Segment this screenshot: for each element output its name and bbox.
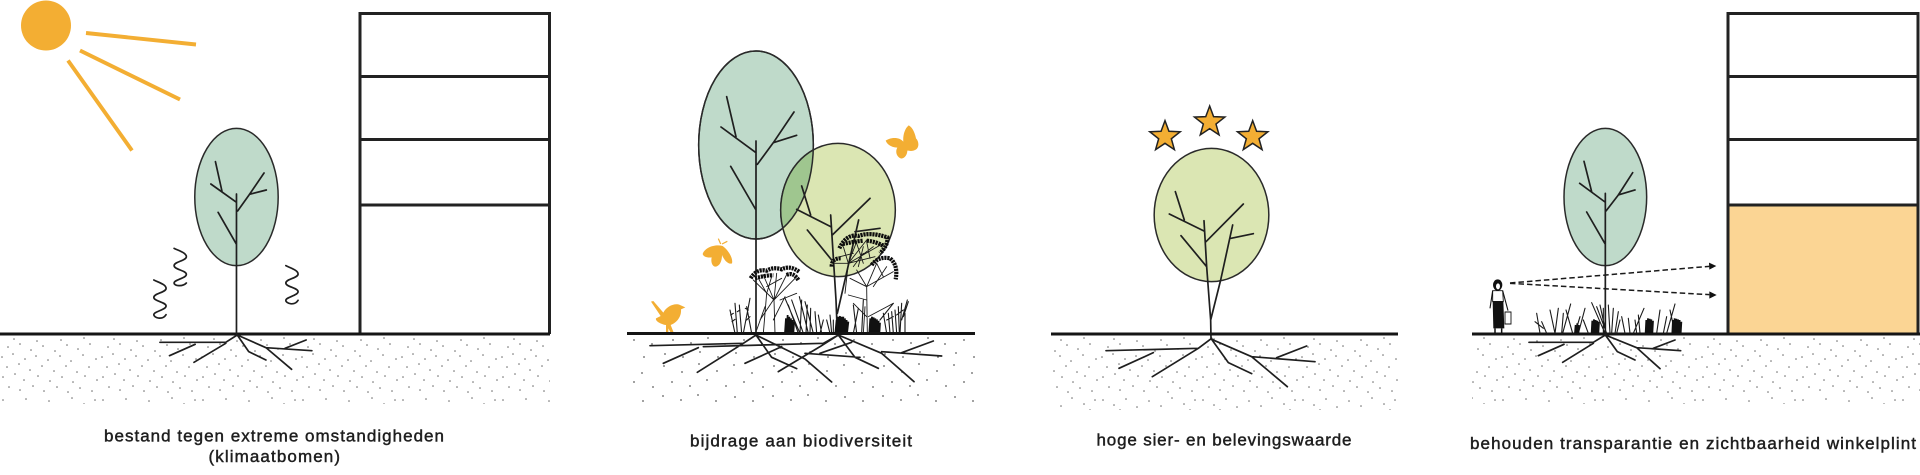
- icon: sun with rays: [21, 0, 196, 150]
- soil: [0, 336, 550, 404]
- icon: bee: [703, 239, 732, 267]
- caption: hoge sier- en belevingswaarde: [1096, 430, 1352, 450]
- trees, plants and animals: [650, 51, 942, 382]
- soil: [1472, 336, 1920, 404]
- panel: bestand tegen extreme omstandigheden: [0, 0, 550, 466]
- tree with roots: [160, 128, 312, 369]
- tree branches: [721, 97, 797, 334]
- panel: bijdrage aan biodiversiteit: [627, 51, 975, 451]
- caption: bijdrage aan biodiversiteit: [690, 432, 912, 450]
- branches and roots: [1169, 192, 1253, 338]
- caption: (klimaatbomen): [208, 447, 340, 466]
- ground line: [0, 332, 550, 336]
- soil: [1051, 336, 1398, 410]
- icon: three stars: [1150, 106, 1268, 150]
- caption: [104, 426, 444, 466]
- crown: [1154, 148, 1269, 282]
- icon: butterfly: [886, 125, 918, 158]
- ground line: [1051, 332, 1398, 336]
- panel: hoge sier- en belevingswaarde: [1051, 106, 1398, 449]
- umbel plants: [751, 234, 896, 333]
- caption: behouden transparantie en zichtbaarheid winkelplint: [1470, 434, 1916, 453]
- caption: bestand tegen extreme omstandigheden: [104, 426, 444, 446]
- low plants: [1535, 303, 1681, 333]
- icon: person with shopping bag: [1490, 279, 1511, 333]
- tree with stars and roots: [1106, 106, 1315, 387]
- soil: [627, 336, 975, 408]
- ground line: [1472, 332, 1920, 336]
- ground line: [627, 332, 975, 335]
- sight line arrows: [1510, 263, 1717, 299]
- crown: [1564, 128, 1647, 266]
- branches and roots: [1580, 161, 1635, 334]
- panel: behouden transparantie en zichtbaarheid winkelplint: [1470, 14, 1920, 453]
- grasses: [730, 297, 908, 333]
- icon: bird: [651, 301, 685, 334]
- roots: [650, 335, 942, 382]
- heat waves: [154, 248, 298, 318]
- building with shop plinth: [1728, 14, 1918, 334]
- tree crowns: [699, 51, 895, 277]
- building outline with floors: [360, 14, 550, 334]
- tree, plants, person and sight lines: [1490, 128, 1717, 369]
